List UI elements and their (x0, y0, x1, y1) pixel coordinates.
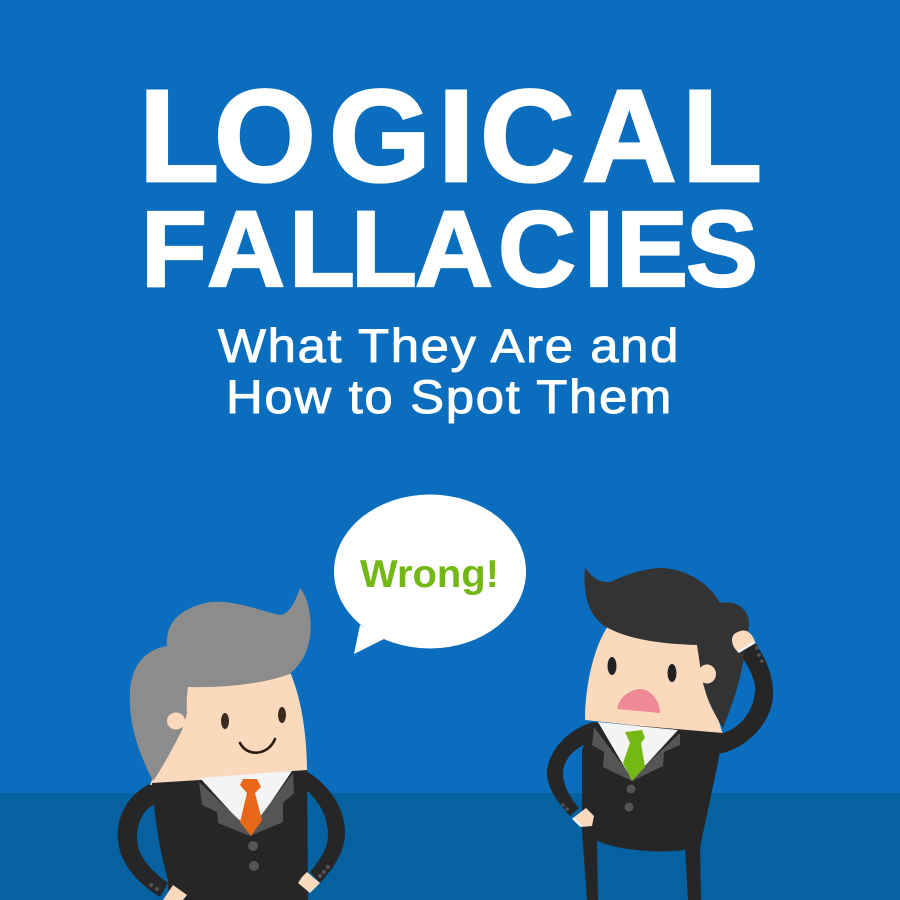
ear (167, 712, 185, 730)
eyes (221, 707, 286, 729)
title (139, 62, 762, 309)
smile (240, 739, 275, 753)
arms (118, 771, 345, 897)
hair (130, 588, 311, 781)
character: smiling grey-haired businessman (118, 588, 345, 900)
torso (582, 722, 723, 851)
torso (152, 770, 308, 900)
title: LOGICAL (139, 62, 762, 209)
speech bubble (334, 494, 526, 654)
lower hand and cuff (561, 803, 594, 827)
shirt collar (200, 771, 292, 833)
open mouth (617, 689, 660, 713)
hands (163, 872, 320, 900)
arms (547, 642, 773, 816)
buttons (248, 841, 259, 871)
face (585, 626, 723, 735)
raised hand and cuff (732, 630, 764, 663)
lapels (592, 727, 680, 781)
subtitle (218, 319, 680, 423)
shirt collar (598, 722, 678, 780)
buttons (624, 784, 636, 812)
lapels (199, 773, 294, 836)
subtitle: What They Are and (218, 319, 680, 372)
ear (698, 664, 716, 684)
face (150, 672, 307, 785)
green tie (623, 730, 645, 781)
orange tie (240, 779, 262, 836)
hair (584, 567, 749, 728)
eyes (608, 657, 676, 682)
sleeve buttons (149, 865, 330, 891)
legs (582, 830, 701, 900)
bubble text: Wrong! (360, 553, 499, 596)
subtitle: How to Spot Them (226, 370, 673, 423)
title: FALLACIES (141, 188, 758, 309)
character: confused dark-haired businessman (547, 567, 773, 900)
